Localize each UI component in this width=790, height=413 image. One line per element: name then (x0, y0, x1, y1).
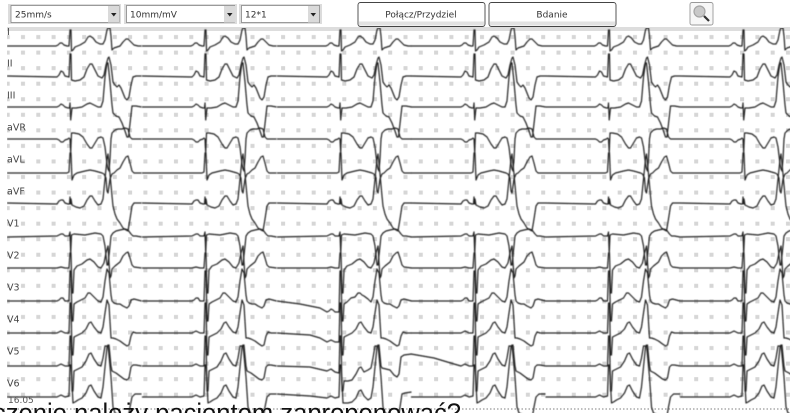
lead I trace (7, 28, 790, 51)
lead layout dropdown: 12*1 (245, 10, 267, 20)
button: assign: Połącz/Przydziel (385, 10, 457, 20)
lead III trace (7, 63, 790, 137)
lead aVR trace (7, 128, 790, 171)
button: assign (358, 2, 485, 26)
button: exam: Bdanie (536, 10, 568, 20)
lead labels: I (7, 27, 10, 38)
button: exam (489, 2, 616, 26)
dotted bottom border (0, 408, 790, 410)
lead aVF trace (7, 154, 790, 231)
lead layout dropdown (239, 4, 322, 24)
lead labels: V1 (7, 218, 20, 230)
lead labels: III (7, 90, 15, 102)
lead V5 trace (7, 336, 790, 391)
lead labels: II (7, 58, 13, 70)
gain dropdown: 10mm/mV (130, 10, 178, 20)
speed dropdown (8, 4, 121, 24)
icon: magnifier (690, 2, 713, 25)
lead II trace (7, 54, 790, 100)
speed dropdown: 25mm/s (15, 10, 52, 20)
lead labels: V4 (7, 314, 20, 326)
lead labels: aVR (7, 122, 26, 134)
lead V4 trace (7, 300, 790, 355)
speed footer label: 16.05 (8, 396, 34, 406)
toolbar (8, 2, 713, 26)
lead labels: aVL (7, 154, 25, 166)
lead labels (7, 27, 26, 390)
lead V2 trace (7, 246, 790, 293)
lead labels: V6 (7, 378, 20, 390)
lead aVL trace (7, 153, 790, 193)
gain dropdown (124, 4, 237, 24)
lead labels: aVF (7, 186, 25, 198)
lead labels: V3 (7, 282, 20, 294)
lead V1 trace (7, 229, 790, 265)
chart top band (7, 27, 790, 31)
lead V3 trace (7, 269, 790, 321)
lead V6 trace (7, 345, 790, 413)
lead labels: V5 (7, 346, 20, 358)
lead labels: V2 (7, 250, 20, 262)
